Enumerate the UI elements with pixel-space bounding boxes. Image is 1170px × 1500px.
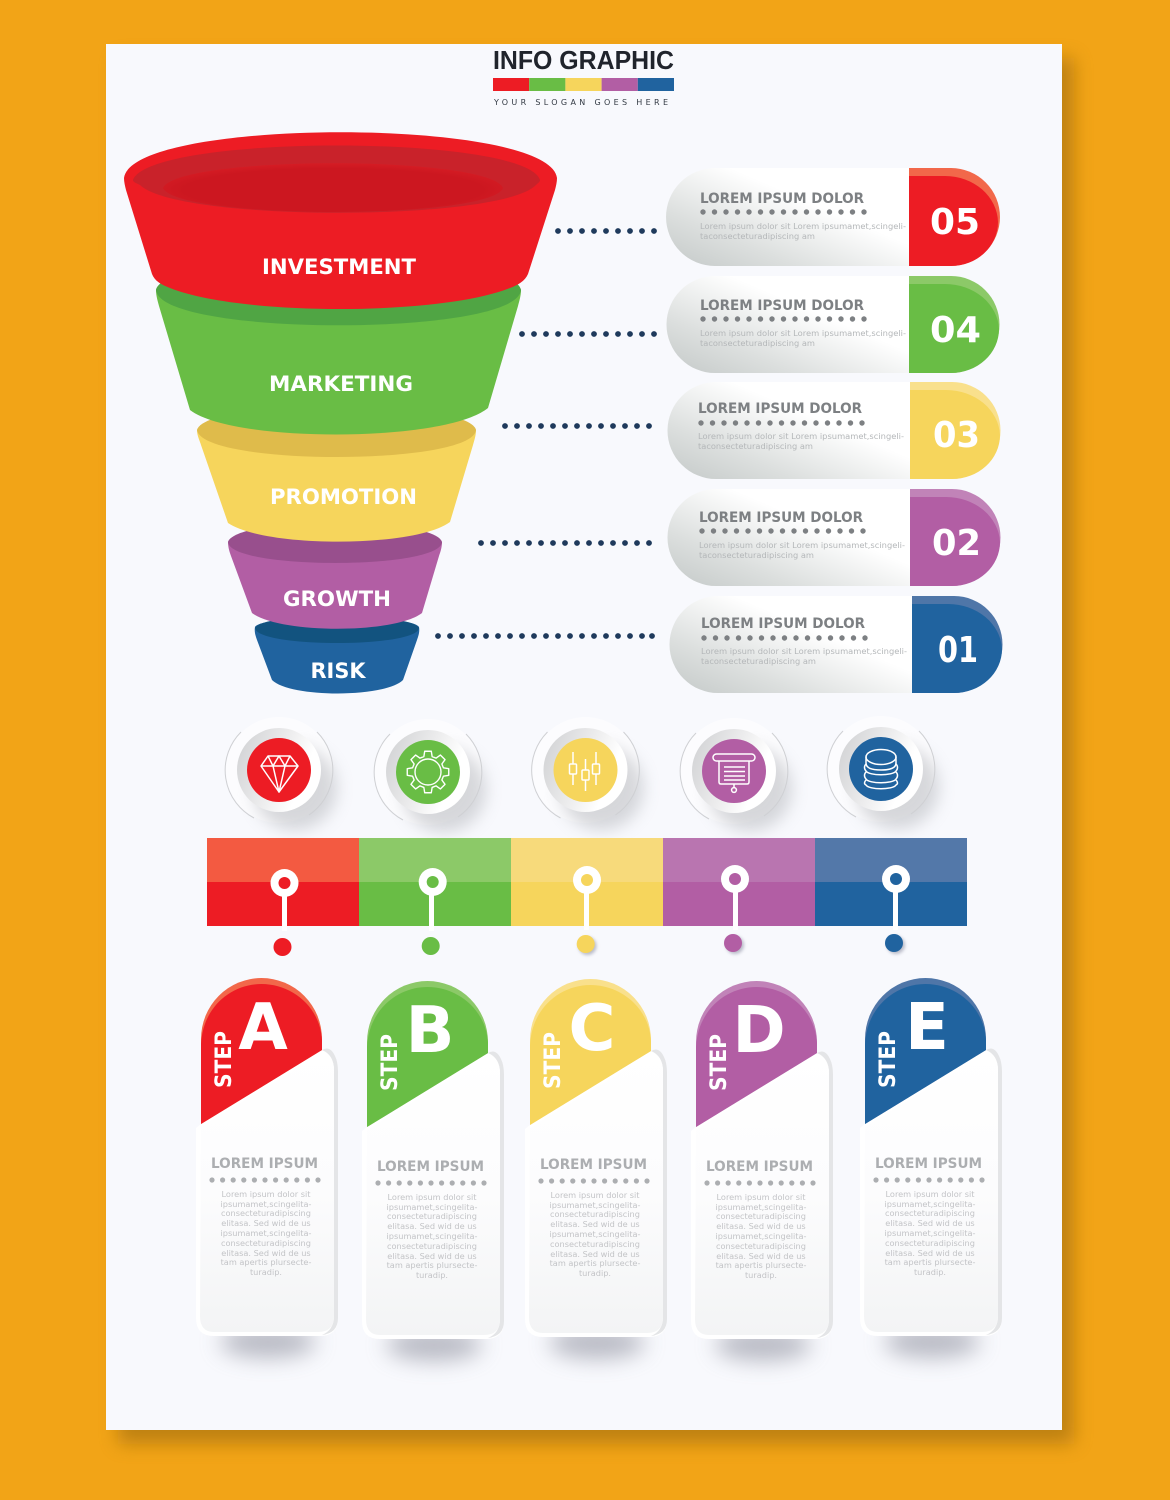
panel: step C card: Lorem ipsum dolor sit (551, 1190, 640, 1200)
panel: pill 02: taconsecteturadipiscing am (699, 551, 814, 560)
panel: pill 04: 04 (930, 310, 981, 351)
marker pin: red (270, 869, 298, 956)
icon: diamond badge (225, 717, 337, 830)
panel: step D card: LOREM IPSUM (706, 1159, 813, 1175)
funnel level: investment (124, 132, 557, 309)
panel: step C card: elitasa. Sed wid de us (550, 1249, 640, 1259)
panel: pill 04 (666, 276, 1000, 373)
panel: step B card (362, 981, 504, 1361)
panel: pill 02 (668, 489, 1000, 586)
marker pin: purple (721, 865, 749, 954)
timeline colour bar (207, 838, 967, 926)
panel: step A card: Lorem ipsum dolor sit (222, 1189, 311, 1199)
panel: pill 05: Lorem ipsum dolor sit Lorem ipsumamet,scingeli- (700, 222, 906, 231)
icon: sliders badge (532, 717, 644, 830)
panel: step E card: elitasa. Sed wid de us (885, 1248, 975, 1258)
panel: step B card: ipsumamet,scingelita- (387, 1202, 478, 1212)
panel: step A card: consecteturadipiscing (221, 1238, 311, 1248)
panel: step D card: Lorem ipsum dolor sit (717, 1192, 806, 1202)
panel: step C card: consecteturadipiscing (550, 1239, 640, 1249)
panel: step C card: tam apertis plursecte- (550, 1258, 640, 1268)
connector: marketing (519, 331, 657, 337)
panel: step A card: ipsumamet,scingelita- (221, 1228, 312, 1238)
panel: step E card: tam apertis plursecte- (885, 1257, 975, 1267)
panel: step C card: consecteturadipiscing (550, 1209, 640, 1219)
panel: step D card: STEP (707, 1034, 732, 1091)
funnel level: marketing (156, 258, 521, 435)
panel: step E card: LOREM IPSUM (875, 1156, 982, 1172)
panel: step E card: consecteturadipiscing (885, 1208, 975, 1218)
panel: step B card: ipsumamet,scingelita- (387, 1231, 478, 1241)
panel: step C card (525, 979, 667, 1359)
connector: growth (478, 540, 652, 546)
funnel level: risk: RISK (310, 659, 366, 683)
panel: step B card: Lorem ipsum dolor sit (388, 1192, 477, 1202)
panel: step A card: turadip. (250, 1267, 282, 1277)
panel: pill 04: Lorem ipsum dolor sit Lorem ipsumamet,scingeli- (700, 329, 906, 338)
marker pin: green (419, 868, 447, 955)
panel: step D card: tam apertis plursecte- (716, 1260, 806, 1270)
panel: step A card: tam apertis plursecte- (221, 1257, 311, 1267)
panel: step E card: STEP (876, 1031, 901, 1088)
panel: step E card: Lorem ipsum dolor sit (886, 1189, 975, 1199)
panel: pill 03: Lorem ipsum dolor sit Lorem ipsumamet,scingeli- (698, 432, 904, 441)
title: INFO GRAPHIC (493, 45, 674, 75)
panel: pill 05 (666, 168, 1000, 266)
panel: pill 02: Lorem ipsum dolor sit Lorem ipsumamet,scingeli- (699, 541, 905, 550)
slogan: YOUR SLOGAN GOES HERE (493, 98, 668, 107)
panel: pill 02: LOREM IPSUM DOLOR (699, 510, 863, 526)
panel: step E card (860, 978, 1002, 1358)
connector dots (435, 228, 657, 639)
panel: pill 01: taconsecteturadipiscing am (701, 657, 816, 666)
panel: pill 04: LOREM IPSUM DOLOR (700, 298, 864, 314)
panel: step D card: elitasa. Sed wid de us (716, 1251, 806, 1261)
panel: step B card: tam apertis plursecte- (387, 1260, 477, 1270)
panel: step C card: STEP (541, 1032, 566, 1089)
panel: step A card: ipsumamet,scingelita- (221, 1199, 312, 1209)
panel: step A card: elitasa. Sed wid de us (221, 1218, 311, 1228)
panel: pill 01 (669, 596, 1002, 693)
funnel level: promotion: PROMOTION (270, 485, 417, 509)
panel: step C card: LOREM IPSUM (540, 1157, 647, 1173)
panel: pill 05: LOREM IPSUM DOLOR (700, 191, 864, 207)
panel: step D card: consecteturadipiscing (716, 1211, 806, 1221)
panel: step C card: ipsumamet,scingelita- (550, 1200, 641, 1210)
marker pin: yellow (573, 866, 601, 955)
panel: step B card: STEP (378, 1034, 403, 1091)
connector: promotion (502, 423, 652, 429)
panel: step D card: consecteturadipiscing (716, 1241, 806, 1251)
panel: pill 01: LOREM IPSUM DOLOR (701, 616, 865, 632)
funnel level: promotion (197, 406, 476, 542)
icon: projector screen badge (680, 718, 792, 831)
panel: step E card: ipsumamet,scingelita- (885, 1228, 976, 1238)
funnel level: risk (255, 616, 419, 694)
icon: coin stack badge (827, 716, 939, 829)
panel: step B card: consecteturadipiscing (387, 1241, 477, 1251)
panel: pill 05: 05 (930, 202, 980, 243)
panel: step B card: consecteturadipiscing (387, 1211, 477, 1221)
colour strip (493, 78, 674, 91)
funnel level: investment: INVESTMENT (262, 255, 417, 279)
panel: step E card: elitasa. Sed wid de us (885, 1218, 975, 1228)
poster shadow (118, 58, 1074, 1444)
panel: step C card: ipsumamet,scingelita- (550, 1229, 641, 1239)
panel: step A card (196, 978, 338, 1358)
poster sheet (106, 44, 1062, 1430)
panel: pill 01: 01 (938, 630, 978, 671)
panel: pill 03: 03 (933, 415, 980, 456)
panel: pill 03: taconsecteturadipiscing am (698, 442, 813, 451)
panel: step C card: elitasa. Sed wid de us (550, 1219, 640, 1229)
panel: step A card: consecteturadipiscing (221, 1208, 311, 1218)
panel: pill 05: taconsecteturadipiscing am (700, 232, 815, 241)
funnel chart (124, 132, 557, 694)
funnel level: growth (228, 522, 442, 629)
panel: step D card: ipsumamet,scingelita- (716, 1231, 807, 1241)
panel: pill 03: LOREM IPSUM DOLOR (698, 401, 862, 417)
panel: pill 03 (668, 382, 1000, 479)
title block (493, 45, 674, 107)
panel: step B card: LOREM IPSUM (377, 1159, 484, 1175)
funnel level: growth: GROWTH (283, 587, 391, 611)
panel: step D card: D (732, 994, 786, 1068)
panel: step C card: C (569, 992, 615, 1066)
panel: step B card: elitasa. Sed wid de us (387, 1221, 477, 1231)
panel: step D card: ipsumamet,scingelita- (716, 1202, 807, 1212)
panel: step B card: B (406, 994, 454, 1068)
panel: step D card: elitasa. Sed wid de us (716, 1221, 806, 1231)
funnel opening (133, 146, 540, 213)
panel: pill 02: 02 (932, 523, 981, 564)
panel: step A card: elitasa. Sed wid de us (221, 1248, 311, 1258)
panel: step E card: turadip. (914, 1267, 946, 1277)
panel: pill 01: Lorem ipsum dolor sit Lorem ipsumamet,scingeli- (701, 647, 907, 656)
funnel level: marketing: MARKETING (269, 372, 413, 396)
panel: step C card: turadip. (579, 1268, 611, 1278)
icon: gear badge (374, 719, 486, 832)
panel: step E card: consecteturadipiscing (885, 1238, 975, 1248)
panel: step A card: LOREM IPSUM (211, 1156, 318, 1172)
panel: step B card: elitasa. Sed wid de us (387, 1251, 477, 1261)
panel: pill 04: taconsecteturadipiscing am (700, 339, 815, 348)
panel: step E card: ipsumamet,scingelita- (885, 1199, 976, 1209)
marker pin: blue (882, 865, 910, 954)
panel: step A card: STEP (212, 1031, 237, 1088)
panel: step E card: E (905, 991, 949, 1065)
panel: step B card: turadip. (416, 1270, 448, 1280)
connector: investment (555, 228, 657, 234)
connector: risk (435, 633, 655, 639)
panel: step D card: turadip. (745, 1270, 777, 1280)
panel: step D card (691, 981, 833, 1361)
panel: step A card: A (238, 991, 288, 1065)
